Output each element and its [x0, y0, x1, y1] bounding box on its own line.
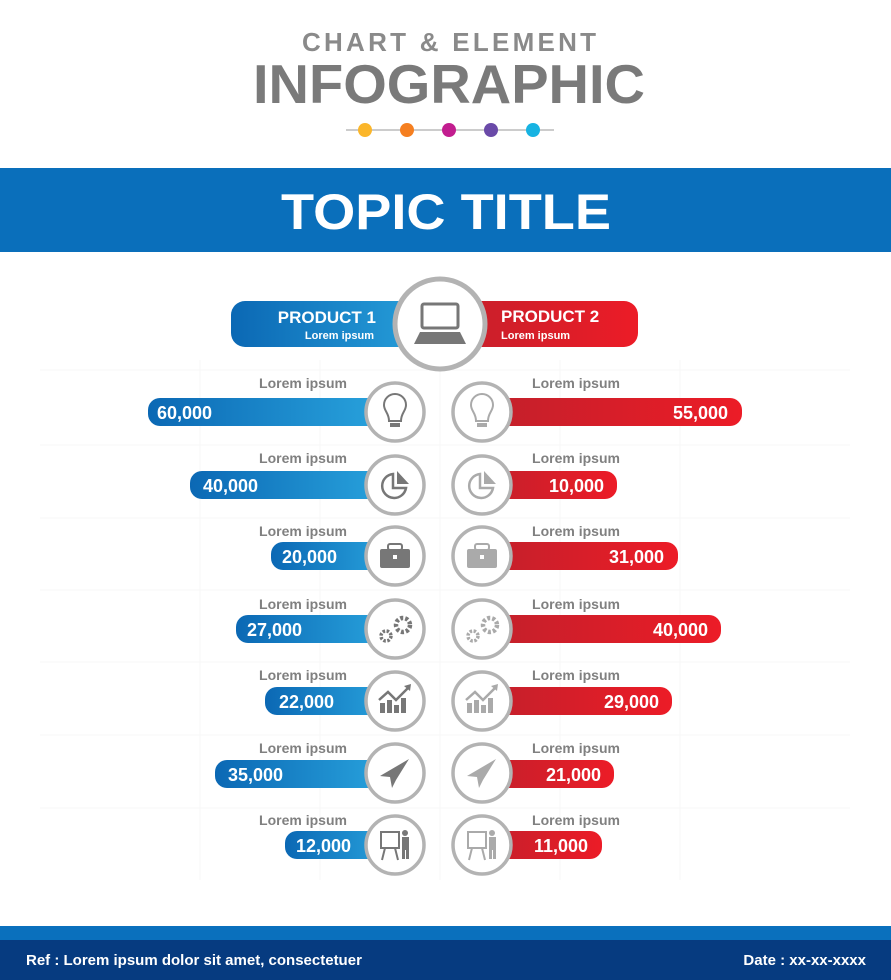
row 3: briefcase: Lorem ipsum — [532, 523, 620, 539]
row 2: pie — [190, 450, 620, 514]
background grid — [40, 360, 850, 880]
heading: chart & element: CHART & ELEMENT — [302, 27, 596, 57]
row 1: lightbulb: Lorem ipsum — [259, 375, 347, 391]
row 1: lightbulb: 60,000 — [157, 403, 212, 423]
decorative dots — [346, 123, 554, 137]
footer: Ref : Lorem ipsum dolor sit amet, consectetuer — [26, 952, 362, 969]
footer — [0, 926, 891, 980]
row 4: gears: Lorem ipsum — [532, 596, 620, 612]
row 3: briefcase: 31,000 — [609, 547, 664, 567]
heading: infographic: INFOGRAPHIC — [253, 53, 645, 115]
product header — [231, 279, 638, 369]
row 5: growth chart: 22,000 — [279, 692, 334, 712]
row 7: presentation — [259, 812, 620, 874]
row 6: paper plane: Lorem ipsum — [259, 740, 347, 756]
row 2: pie: 40,000 — [203, 476, 258, 496]
row 3: briefcase — [259, 523, 678, 585]
row 4: gears — [236, 596, 721, 658]
row 7: presentation: Lorem ipsum — [259, 812, 347, 828]
product 2 bar: Lorem ipsum — [501, 330, 570, 342]
row 2: pie: Lorem ipsum — [532, 450, 620, 466]
row 6: paper plane: 35,000 — [228, 765, 283, 785]
product 2 bar: PRODUCT 2 — [501, 307, 599, 326]
row 4: gears: 27,000 — [247, 620, 302, 640]
row 3: briefcase: Lorem ipsum — [259, 523, 347, 539]
product 1 bar — [231, 301, 451, 347]
row 7: presentation: 11,000 — [534, 836, 588, 856]
icon: laptop — [395, 279, 485, 369]
row 1: lightbulb: Lorem ipsum — [532, 375, 620, 391]
row 6: paper plane: Lorem ipsum — [532, 740, 620, 756]
topic title band: TOPIC TITLE — [281, 184, 611, 240]
topic title band — [0, 168, 891, 252]
row 2: pie: Lorem ipsum — [259, 450, 347, 466]
row 4: gears: 40,000 — [653, 620, 708, 640]
row 6: paper plane: 21,000 — [546, 765, 601, 785]
product 1 bar: Lorem ipsum — [305, 330, 374, 342]
row 5: growth chart — [259, 667, 672, 730]
row 1: lightbulb — [148, 375, 742, 441]
row 3: briefcase: 20,000 — [282, 547, 337, 567]
row 7: presentation: Lorem ipsum — [532, 812, 620, 828]
row 1: lightbulb: 55,000 — [673, 403, 728, 423]
product 1 bar: PRODUCT 1 — [278, 308, 376, 327]
row 4: gears: Lorem ipsum — [259, 596, 347, 612]
footer: Date : xx-xx-xxxx — [743, 952, 867, 969]
row 2: pie: 10,000 — [549, 476, 604, 496]
row 6: paper plane — [215, 740, 620, 802]
row 5: growth chart: Lorem ipsum — [259, 667, 347, 683]
row 7: presentation: 12,000 — [296, 836, 351, 856]
row 5: growth chart: Lorem ipsum — [532, 667, 620, 683]
row 5: growth chart: 29,000 — [604, 692, 659, 712]
product 2 bar — [430, 301, 638, 347]
